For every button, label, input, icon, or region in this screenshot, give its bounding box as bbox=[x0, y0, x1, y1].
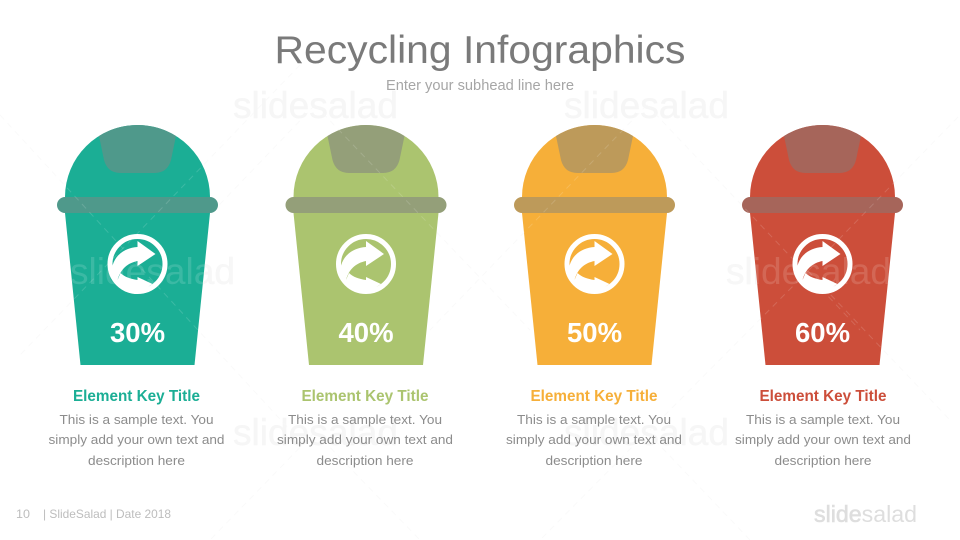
watermarks on background: slidesalad bbox=[564, 85, 729, 126]
description 3: simply add your own text and bbox=[506, 432, 682, 447]
watermarks on background: slidesalad bbox=[233, 412, 398, 453]
lid band bbox=[57, 197, 218, 213]
percentage 50%: 50% bbox=[567, 317, 622, 348]
watermarks on background bbox=[70, 85, 891, 453]
subhead: Enter your subhead line here bbox=[386, 78, 574, 94]
bin 1: teal 30% bbox=[57, 125, 218, 365]
description 1: description here bbox=[88, 453, 185, 468]
watermarks over bins: slidesalad bbox=[70, 251, 235, 292]
description 1: This is a sample text. You bbox=[60, 412, 214, 427]
text block 3 bbox=[506, 388, 682, 468]
description 3: This is a sample text. You bbox=[517, 412, 671, 427]
footer page number and date: 10 bbox=[16, 507, 30, 521]
footer page number and date: | SlideSalad | Date 2018 bbox=[43, 507, 171, 521]
description 1: simply add your own text and bbox=[48, 432, 224, 447]
icon: recycle arrows bbox=[567, 236, 622, 294]
bin body and dome bbox=[750, 125, 895, 365]
lid handle bbox=[99, 125, 176, 173]
watermarks on background: slidesalad bbox=[726, 251, 891, 292]
bin body and dome bbox=[522, 125, 667, 365]
bin 2: green 40% bbox=[286, 125, 446, 365]
percentage 40%: 40% bbox=[338, 317, 394, 348]
percentage 30%: 30% bbox=[110, 317, 165, 348]
icon: recycle arrows bbox=[795, 236, 850, 294]
text block 1 bbox=[48, 388, 224, 468]
text block 4 bbox=[735, 388, 911, 468]
watermarks over bins bbox=[70, 251, 891, 292]
key title 1: Element Key Title bbox=[73, 388, 200, 405]
icon: recycle arrows bbox=[110, 236, 165, 294]
description 4: description here bbox=[774, 453, 872, 468]
percentage 60%: 60% bbox=[795, 317, 850, 348]
bin 3: orange 50% bbox=[514, 125, 675, 365]
description 4 bbox=[735, 412, 911, 468]
lid band bbox=[742, 197, 903, 213]
watermarks on background: slidesalad bbox=[70, 251, 235, 292]
description 2: This is a sample text. You bbox=[288, 412, 442, 427]
description 1 bbox=[48, 412, 224, 468]
lid band bbox=[514, 197, 675, 213]
bin body and dome bbox=[65, 125, 210, 365]
key title 3: Element Key Title bbox=[530, 388, 658, 405]
watermarks on background: slidesalad bbox=[564, 412, 729, 453]
text block 2 bbox=[277, 388, 453, 468]
lid handle bbox=[556, 125, 633, 173]
key title 2: Element Key Title bbox=[302, 388, 429, 405]
watermarks over bins: slidesalad bbox=[726, 251, 891, 292]
bin 4: red 60% bbox=[742, 125, 903, 365]
description 2: simply add your own text and bbox=[277, 432, 453, 447]
description 2: description here bbox=[316, 453, 414, 468]
key title 4: Element Key Title bbox=[760, 388, 887, 405]
lid band bbox=[286, 197, 446, 213]
lid handle bbox=[328, 125, 404, 173]
icon: recycle arrows bbox=[338, 236, 394, 294]
title: Recycling Infographics bbox=[274, 29, 686, 72]
description 4: simply add your own text and bbox=[735, 432, 911, 447]
watermarks on background: slidesalad bbox=[233, 85, 398, 126]
lid handle bbox=[784, 125, 861, 173]
description 3 bbox=[506, 412, 682, 468]
description 2 bbox=[277, 412, 453, 468]
description 3: description here bbox=[546, 453, 642, 468]
bin body and dome bbox=[294, 125, 438, 365]
footer logo: slidesalad bbox=[814, 501, 917, 527]
description 4: This is a sample text. You bbox=[746, 412, 900, 427]
